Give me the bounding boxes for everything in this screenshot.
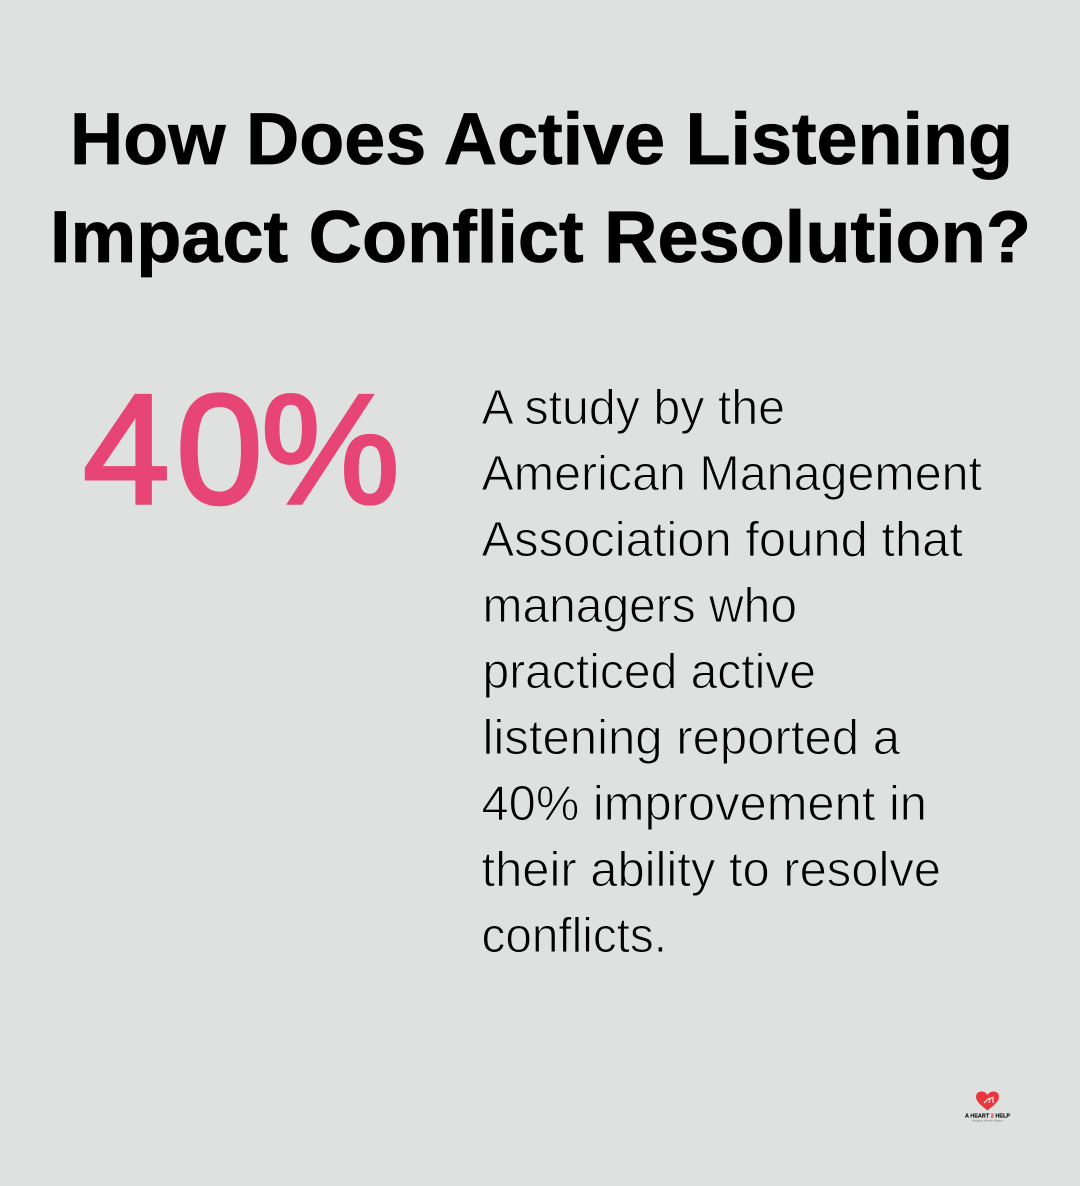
description text: practiced active <box>482 645 816 699</box>
description text: conflicts. <box>482 909 667 963</box>
logo: A Heart 2 Help <box>965 1092 1010 1122</box>
description text: A study by the <box>482 381 785 435</box>
description text: American Management <box>482 447 982 501</box>
icon: hands inside heart <box>984 1098 993 1103</box>
description text: their ability to resolve <box>482 843 941 897</box>
title <box>50 99 1031 278</box>
logo tagline: Helping Hands Matter <box>972 1120 1003 1122</box>
title: Impact Conflict Resolution? <box>50 197 1031 278</box>
big statistic: 40%: 40% <box>83 363 400 537</box>
logo wordmark: A HEART 2 HELP <box>965 1114 1010 1120</box>
description text: 40% improvement in <box>482 777 927 831</box>
description text: Association found that <box>482 513 963 567</box>
description text: listening reported a <box>482 711 901 765</box>
title: How Does Active Listening <box>70 99 1013 180</box>
description text: managers who <box>482 579 797 633</box>
description text <box>482 381 982 963</box>
icon: red heart <box>976 1092 999 1110</box>
